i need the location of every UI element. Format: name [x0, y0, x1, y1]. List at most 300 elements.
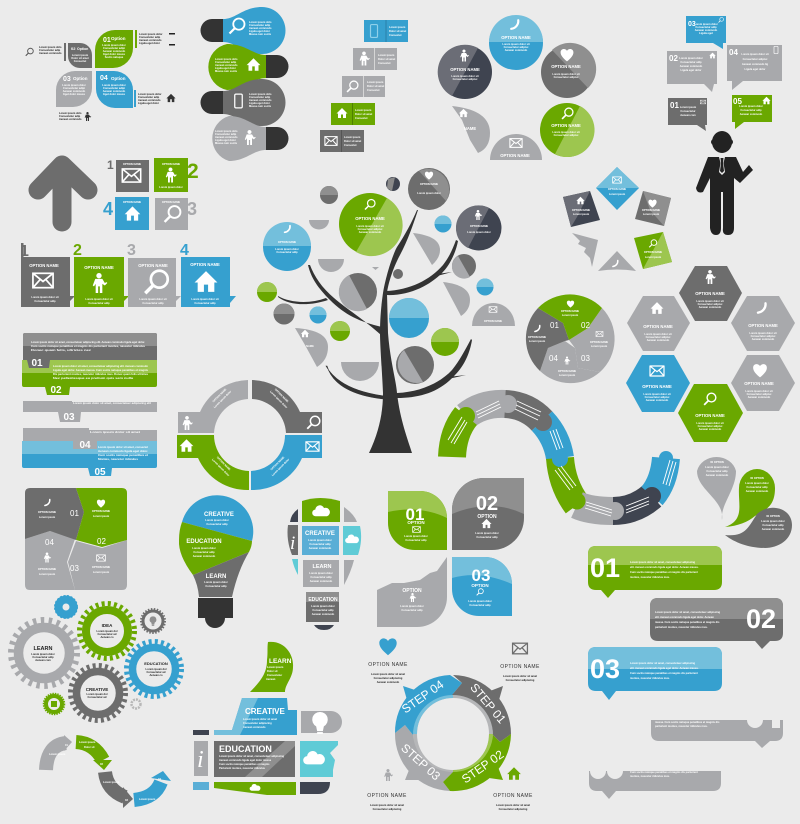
bubble 02 — [667, 51, 717, 92]
bulb: gray person: Consectetur adip — [215, 132, 237, 136]
drop: gray — [697, 457, 736, 520]
bubble 03: Aenean commodo — [695, 28, 718, 32]
circle: charcoal person — [438, 45, 492, 99]
circle: green search: Consectetur adipisc — [358, 227, 383, 231]
panel: pie of five steps: 03 — [581, 354, 590, 363]
square 3 search: OPTION NAME — [162, 200, 180, 204]
piece 03: 03 — [70, 564, 79, 573]
circle: blue phone: Lorem ipsum dolor sit — [502, 42, 530, 46]
hexagon: gray home: Consectetur adipisc — [646, 335, 671, 339]
bubble 03: Lorem ipsum dolor — [694, 22, 718, 26]
partial circle: gray home: NAME — [464, 126, 476, 131]
bubble 03: Consectetur adip — [695, 25, 717, 29]
leaf 04 gray torn: Lorem ipsum dolor — [400, 604, 424, 608]
tile: green learn: Aenean — [266, 677, 276, 681]
panel: three colour light bulb: Consectetur adip — [206, 522, 228, 526]
panel: three drop callouts — [697, 457, 792, 548]
segment: green step 02: STEP 02 — [459, 747, 507, 786]
bulb: blue search: Aenean commodo — [249, 26, 272, 30]
leaf 02 dark — [452, 478, 524, 550]
panel: leaf quartet options: 01 — [103, 37, 111, 44]
hexagon: gray home: Lorem ipsum dolor sit — [644, 332, 672, 336]
box 05 gray torn — [589, 770, 721, 799]
segment green — [452, 416, 466, 457]
banner 01: Cum sociis natoque penatibus et magnis dis parturient montes, nascetur ridiculus — [31, 344, 146, 348]
segment dark — [505, 404, 542, 421]
box 4 home: Lorem ipsum dolor sit — [191, 297, 219, 301]
slice: gray right — [569, 308, 615, 372]
panel: leaf quartet options: 02 — [71, 46, 76, 51]
arrow: green 02: 02 — [100, 762, 103, 766]
box 2 person: 2 — [73, 242, 82, 259]
box: gray search — [342, 76, 385, 97]
leaf 03 blue: Lorem ipsum dolor — [468, 599, 492, 603]
bulb: green home: Aenean commodo — [215, 63, 238, 67]
bulb: gray person: Lorem ipsum dolo — [215, 129, 238, 133]
circle: dark gray heart — [408, 168, 450, 210]
arrow: dark 03: 03 — [125, 798, 128, 802]
hexagon: blue mail — [626, 355, 690, 412]
banner 05: Aenean commodo ligula eget dolor. — [98, 449, 148, 453]
banner 02: Ligula eget dolor. Aenean massa. Cum sociis natoque penatibus et magnis — [53, 368, 149, 372]
hexagon: gray heart: Aenean commodo — [748, 395, 771, 399]
tile: dark education: Cum sociis natoque penatibus et magnis — [219, 762, 270, 766]
panel: leaf quartet options: Consectetur adip — [139, 35, 161, 39]
panel: circle cycle — [438, 15, 596, 160]
panel: pie of five steps: OPTION NAME — [590, 340, 608, 344]
arrow: gray 01: Lorem ipsum — [49, 752, 66, 756]
segment: blue mail: Lorem ipsum dolor — [271, 458, 290, 477]
segment: blue mail: OPTION NAME — [269, 455, 285, 471]
hexagon: gray phone: Aenean commodo — [752, 337, 775, 341]
piece 03: OPTION NAME — [92, 565, 110, 569]
panel: leaf quartet options: Lorem ipsum dolor — [102, 43, 126, 47]
bulb gray segment — [193, 552, 249, 597]
box: green home: Lorem ipsum — [355, 108, 372, 112]
square 4 home: OPTION NAME — [123, 200, 141, 204]
panel: stacked small boxes — [320, 20, 408, 152]
tile: teal cloud — [300, 741, 338, 777]
icon: home — [507, 767, 521, 780]
box: gray person: Dolor sit amet — [378, 57, 395, 61]
square 4 home — [103, 197, 149, 230]
leaf 04 gray torn: Consectetur adip — [401, 608, 423, 612]
tile: dark education: EDUCATION — [308, 597, 338, 603]
green leaf 01 — [95, 30, 133, 68]
bulb socket — [198, 598, 233, 628]
bubble 04 — [727, 45, 782, 90]
tile: blue creative: CREATIVE — [305, 531, 335, 537]
panel: four step square — [25, 488, 127, 590]
panel: pie of five steps: Lorem ipsum — [591, 344, 608, 348]
hexagon: dark person: Aenean commodo — [699, 305, 722, 309]
bulb: gray person: Aenean commodo — [215, 135, 238, 139]
bubble 02: Ligula eget dolor — [681, 68, 701, 72]
box 03 blue: Cum sociis natoque penatibus et magnis dis parturient — [630, 671, 698, 675]
circle: dark gray heart: Lorem ipsum dolor sit — [552, 72, 580, 76]
arrow: gray 01: 01 — [65, 743, 68, 747]
icon: home — [166, 94, 176, 102]
leaf 02 dark: 02 — [476, 493, 498, 515]
tile: dark education: Aenean commodo ligula eget dolor massa — [219, 758, 272, 762]
hexagon: green search: Aenean commodo — [699, 427, 722, 431]
piece 04: OPTION NAME — [38, 567, 56, 571]
box 01 green: Lorem ipsum dolor sit amet, consectetuer adipiscing — [630, 560, 696, 564]
panel: hexagon cluster — [626, 266, 795, 442]
panel: four step ring — [367, 638, 540, 811]
box 04 gray torn: parturient montes, nascetur ridiculus mus. — [655, 724, 708, 728]
panel: leaf quartet options: Lorem ipsum — [72, 53, 89, 57]
box 4 home: OPTION NAME — [190, 262, 220, 267]
leaf 02 dark: Lorem ipsum dolor — [475, 531, 499, 535]
bulb: blue search: Lorem ipsum dolo — [249, 20, 272, 24]
tile: gray info: i — [197, 747, 204, 773]
banner 02 — [22, 360, 157, 396]
square: charcoal home — [563, 191, 600, 227]
circle: dark gray heart: OPTION NAME — [420, 182, 438, 186]
panel: leaf quartet options: Lorem ipsum dolor — [139, 32, 162, 36]
bulb: dark phone: Lorem ipsum dolo — [249, 92, 272, 96]
drop: dark: 00 OPTION — [766, 514, 780, 518]
drop: green: Consectetur adip — [746, 485, 768, 489]
diamond: blue mail — [596, 167, 639, 210]
leaf 01 green: OPTION — [407, 520, 425, 525]
segment: green home: Lorem ipsum dolor — [211, 458, 230, 477]
banner 01: 01 — [31, 358, 43, 369]
panel: speech bubbles with businessman — [667, 16, 782, 235]
circle: green search: Lorem ipsum dolor sit — [552, 130, 580, 134]
segment: green step 02 — [443, 734, 511, 791]
panel: leaf quartet options: Aenean commodo — [59, 117, 82, 121]
panel: leaf quartet options: Consectetur adip — [138, 95, 160, 99]
gear: tiny gray — [132, 700, 140, 708]
bubble 04: Consectetur adipisc — [743, 57, 768, 61]
panel: leaf quartet options: Aenean commodo — [63, 89, 86, 93]
arrow: gray 01 — [46, 735, 72, 770]
segment: blue step 04 — [395, 675, 462, 735]
panel: tree with circles: OPTION NAME — [484, 319, 502, 323]
half discs and wedges — [295, 220, 515, 381]
banner 02: Lorem ipsum dolor sit amet, consectetuer adipiscing elit. Aenean commodo — [53, 364, 148, 368]
tile: blue small — [193, 782, 209, 790]
drop: green: 00 OPTION — [750, 476, 764, 480]
circle: blue phone: OPTION NAME — [501, 35, 531, 40]
box: gray search: Dolor sit amet — [367, 84, 384, 88]
icon: person — [384, 769, 393, 781]
circle: blue phone: OPTION NAME — [278, 240, 296, 244]
tile: green learn: Lorem ipsum — [267, 665, 284, 669]
panel: three colour light bulb: LEARN — [206, 574, 226, 580]
circle: blue phone: Aenean commodo — [505, 48, 528, 52]
panel: S arrows steps — [46, 735, 171, 808]
tile: charcoal corner — [300, 782, 330, 794]
panel: pie of five steps: Lorem ipsum — [562, 313, 579, 317]
bulb: green home: Ligula eget dolor — [215, 66, 236, 70]
leaf 01 green: Lorem ipsum dolor — [404, 534, 428, 538]
segment: dark step 01: STEP 01 — [467, 681, 509, 726]
bubble 04: Aenean commodo lig — [742, 62, 769, 66]
gear: gray learn: Consectetur adip — [32, 655, 54, 659]
tile: teal head — [343, 526, 361, 555]
half circle: gray mail — [490, 134, 542, 160]
tile: blue creative: Aenean commodo — [309, 546, 332, 550]
icon: person — [85, 112, 91, 121]
circle: blue phone: Consectetur adip — [276, 250, 298, 254]
segment: dark step 01 — [452, 675, 511, 742]
slice: green top — [538, 294, 602, 340]
drop: gray: Consectetur adip — [706, 469, 728, 473]
banner 04 — [23, 428, 157, 451]
bulb: blue search: Consectetur adip — [249, 23, 271, 27]
circle: dark gray heart — [541, 43, 596, 98]
piece 02 — [76, 488, 127, 547]
bulb: gray person — [212, 116, 288, 161]
bubble 02: Aenean commodo — [680, 64, 703, 68]
inner ring — [415, 696, 491, 772]
bubble 01: Consectetur — [680, 109, 696, 113]
leaf 03 blue: OPTION — [471, 583, 489, 588]
panel: pie of five steps: Lorem ipsum — [529, 339, 546, 343]
bubble 05: Consectetur adip — [740, 108, 762, 112]
banner 04: Lorem ipsum dolor sit amet — [90, 430, 140, 434]
square 1 mail: 1 — [107, 158, 114, 172]
hexagon: dark person: Consectetur adipisc — [698, 302, 723, 306]
hexagon: dark person — [679, 266, 742, 321]
panel: leaf quartet options: Lorem ipsum dolor — [102, 83, 126, 87]
hexagon: green search — [678, 384, 743, 442]
panel: leaf quartet options: 04 — [100, 75, 108, 82]
bulb: green home: Massa cum sociis — [215, 69, 238, 73]
half circle: gray mail: OPTION NAME — [500, 153, 530, 158]
slice: dark left — [526, 308, 569, 371]
box 02 dark: Lorem ipsum dolor sit amet, consectetuer adipiscing — [655, 610, 721, 614]
panel: leaf quartet options: Ligula eget dolor — [139, 41, 160, 45]
panel: leaf quartet options: 03 — [63, 76, 71, 83]
gear: dark creative: Lorem ipsum dol — [87, 692, 108, 696]
panel: pie of five steps: Lorem ipsum — [559, 373, 576, 377]
gear: small green — [44, 694, 64, 714]
tile: gray fragment — [344, 560, 354, 585]
torn square gray — [572, 233, 598, 267]
box 01 green — [588, 546, 722, 598]
label: option top left — [368, 662, 408, 684]
box 1 mail: Consectetur adip — [34, 299, 56, 303]
box 1 mail: OPTION NAME — [29, 263, 59, 268]
circle: blue phone — [263, 222, 311, 271]
panel: tree with circles — [257, 168, 515, 453]
square 2 person: 2 — [187, 160, 199, 183]
panel: leaf quartet options: Consectetur adipi — [103, 86, 125, 90]
icon: large gray up arrow — [38, 165, 88, 222]
drop: gray: 00 OPTION — [710, 460, 724, 464]
bubble 05: 05 — [733, 97, 742, 106]
arrow: blue 04: Lorem ipsum — [139, 797, 156, 801]
segment blue end — [652, 458, 666, 496]
box 01 green: elit. Aenean commodo ligula eget dolor. Aenean massa. — [630, 565, 699, 569]
bulb: dark phone: Massa cum sociis — [249, 104, 272, 108]
segment: gray person — [178, 380, 248, 433]
box 2 person — [73, 242, 129, 307]
box 05 gray torn: montes, nascetur ridiculus mus. — [630, 774, 670, 778]
box 03 blue — [588, 647, 722, 700]
tile: dark education: Lorem ipsum dolor — [311, 604, 335, 608]
bulb: gray person: Ligula eget dolor — [215, 138, 236, 142]
tile: blue creative — [302, 526, 339, 555]
panel: leaf quartet options: Option — [111, 36, 126, 41]
banner 03 — [23, 401, 157, 423]
segment: blue mail — [251, 435, 322, 490]
box 02 dark — [650, 598, 783, 649]
panel: leaf quartet options — [26, 30, 176, 121]
bubble 02: Consectetur adip — [680, 60, 702, 64]
panel: four option boxes row — [20, 242, 236, 307]
panel: three colour light bulb: Consectetur adip — [205, 584, 227, 588]
tile: dark education: Consectetur adip — [312, 608, 334, 612]
piece 01: Lorem ipsum — [39, 515, 56, 519]
piece 03 — [68, 540, 127, 590]
panel: tree with circles: NAME — [306, 344, 314, 348]
label: option top right: Lorem ipsum dolor sit amet — [503, 674, 537, 678]
small triangles — [403, 686, 415, 700]
hexagon: gray phone: Consectetur adipisc — [751, 334, 776, 338]
circle: charcoal person: OPTION NAME — [450, 67, 480, 72]
gear: green idea: Consectetur ad — [98, 632, 117, 636]
gear: small blue — [55, 596, 77, 618]
panel: leaf quartet options: Eget dolor massa — [63, 92, 85, 96]
circle: dark gray heart: Consectetur adipisc — [554, 75, 579, 79]
piece 01 — [25, 488, 84, 540]
gear: dark creative: CREATIVE — [86, 687, 108, 692]
tile: gray learn: Lorem ipsum dolor — [309, 571, 333, 575]
panel: three colour light bulb: EDUCATION — [186, 539, 222, 545]
box: dark mail — [320, 130, 364, 152]
segment: green home — [177, 435, 249, 490]
tile: gray learn: Consectetur adip — [310, 575, 332, 579]
box 02 dark: 02 — [746, 604, 776, 634]
segment: dark search — [252, 380, 322, 433]
tile: green footer — [214, 782, 296, 795]
banner 02: Dis parturient montes, nascetur ridiculus mus. Donec quam felis ultricies — [53, 372, 149, 376]
hexagon: green search: Lorem ipsum dolor sit — [696, 421, 724, 425]
panel: pie of five steps: OPTION NAME — [528, 335, 546, 339]
tile fragments — [290, 509, 298, 522]
panel: four numbered squares — [103, 158, 199, 230]
panel: leaf quartet options: Dolor sit amet — [71, 56, 89, 60]
square: gray heart: Lorem ipsum — [643, 212, 660, 216]
hexagon: gray heart — [731, 355, 795, 411]
panel: pie of five steps: OPTION NAME — [558, 369, 576, 373]
bubble 03: Ligula eget — [699, 31, 713, 35]
drop: dark — [725, 508, 792, 548]
box 3 search: 3 — [127, 242, 136, 259]
tile: green cloud — [302, 498, 340, 522]
tile: dark small — [193, 730, 209, 735]
label: option top left: Aenean commodo — [377, 680, 400, 684]
gear: dark creative — [70, 666, 126, 720]
hexagon: gray phone: OPTION NAME — [748, 323, 778, 328]
icon: search — [26, 48, 33, 56]
banner 05: Lorem ipsum dolor sit amet, consectet — [98, 445, 148, 449]
segment gray lower — [577, 505, 613, 511]
box 02 dark: elit. Aenean commodo ligula eget dolor. Aenean — [655, 615, 714, 619]
box 01 green: Cum sociis natoque penatibus et magnis dis parturient — [630, 570, 698, 574]
bulb: blue search: Ligula eget dolor — [249, 29, 270, 33]
hexagon: gray home — [627, 296, 690, 351]
gear: gray learn: Lorem ipsum dolor — [31, 652, 55, 656]
panel: leaf quartet options: Consectet — [74, 59, 86, 63]
panel: tiled light bulb — [288, 498, 361, 630]
panel: numbered speech boxes — [588, 546, 783, 799]
box: dark mail: Dolor sit amet — [344, 139, 361, 143]
bubble 03 — [686, 16, 726, 49]
tile: teal fragment — [292, 559, 298, 575]
panel: leaf quartet options: Consectetur adip — [59, 114, 81, 118]
banner 02: Nec pellentesque eu pretium quis sem nulla — [53, 376, 134, 380]
partial circle: gray home — [452, 106, 490, 153]
box: dark mail: Consectet — [344, 143, 357, 147]
panel: leaf quartet options: Aenean commodo — [39, 51, 62, 55]
bulb blue segment — [182, 495, 253, 541]
square: gray heart: OPTION NAME — [642, 208, 660, 212]
gear: blue education: Consectetur ad — [147, 670, 166, 674]
piece 04: Lorem ipsum — [39, 572, 56, 576]
square 1 mail: OPTION NAME — [123, 162, 141, 166]
label: option bottom right: Lorem ipsum dolor sit amet — [496, 803, 530, 807]
circle: green search — [339, 193, 403, 256]
box 4 home: 4 — [180, 242, 189, 259]
tile: gray learn: Aenean commodo — [310, 579, 333, 583]
panel: leaf quartet options: Option — [111, 76, 126, 81]
segment: dark search: OPTION NAME — [274, 387, 290, 403]
segment: gray person: OPTION NAME — [211, 387, 227, 403]
box 4 home: Consectetur adip — [194, 301, 216, 305]
drop: green: Aenean commodo — [746, 489, 769, 493]
leaf 01 green: 01 — [406, 505, 424, 524]
segment: blue step 04: STEP 04 — [399, 677, 447, 716]
bubble 01: 01 — [670, 101, 679, 110]
box 2 person: Lorem ipsum dolor sit — [85, 297, 113, 301]
leaf 04 gray torn: OPTION — [402, 588, 422, 594]
square 3 search: 3 — [187, 199, 197, 219]
panel: thumbs up tiles — [193, 642, 342, 795]
gear: blue education — [126, 642, 182, 696]
box 1 mail — [20, 243, 75, 307]
panel: leaf quartet options: Lorem ipsum dolo — [59, 111, 82, 115]
square 3 search — [155, 198, 197, 230]
circle: dark gray heart: OPTION NAME — [551, 64, 581, 69]
box 2 person: OPTION NAME — [84, 265, 114, 270]
leaf 01 green — [388, 491, 447, 550]
label: option bottom left: OPTION NAME — [367, 793, 407, 799]
tile: dark education: EDUCATION — [219, 744, 272, 754]
piece 01: 01 — [70, 509, 79, 518]
hexagon: gray heart: Lorem ipsum dolor sit — [745, 389, 773, 393]
circle: charcoal person: Consectetur adipisc — [453, 77, 478, 81]
box: green home — [331, 103, 375, 125]
bulb green segment — [179, 522, 252, 575]
tile: blue creative: Consectetur adipiscing — [243, 721, 272, 725]
banner 05: Montes, nascetur ridiculus — [98, 457, 139, 461]
panel: leaf quartet options: Aenean commodo — [103, 89, 126, 93]
arrow: dark 03 — [103, 772, 133, 808]
box: green home: Dolor sit amet — [355, 112, 372, 116]
piece 04 — [25, 531, 75, 590]
panel: option leaves — [377, 478, 524, 627]
label: option bottom right: OPTION NAME — [493, 793, 533, 799]
box 02 dark: massa. Cum sociis natoque penatibus et magnis dis — [655, 620, 720, 624]
bubble 01: Aenean com — [680, 113, 696, 117]
label: option bottom left: Lorem ipsum dolor sit amet — [370, 803, 404, 807]
